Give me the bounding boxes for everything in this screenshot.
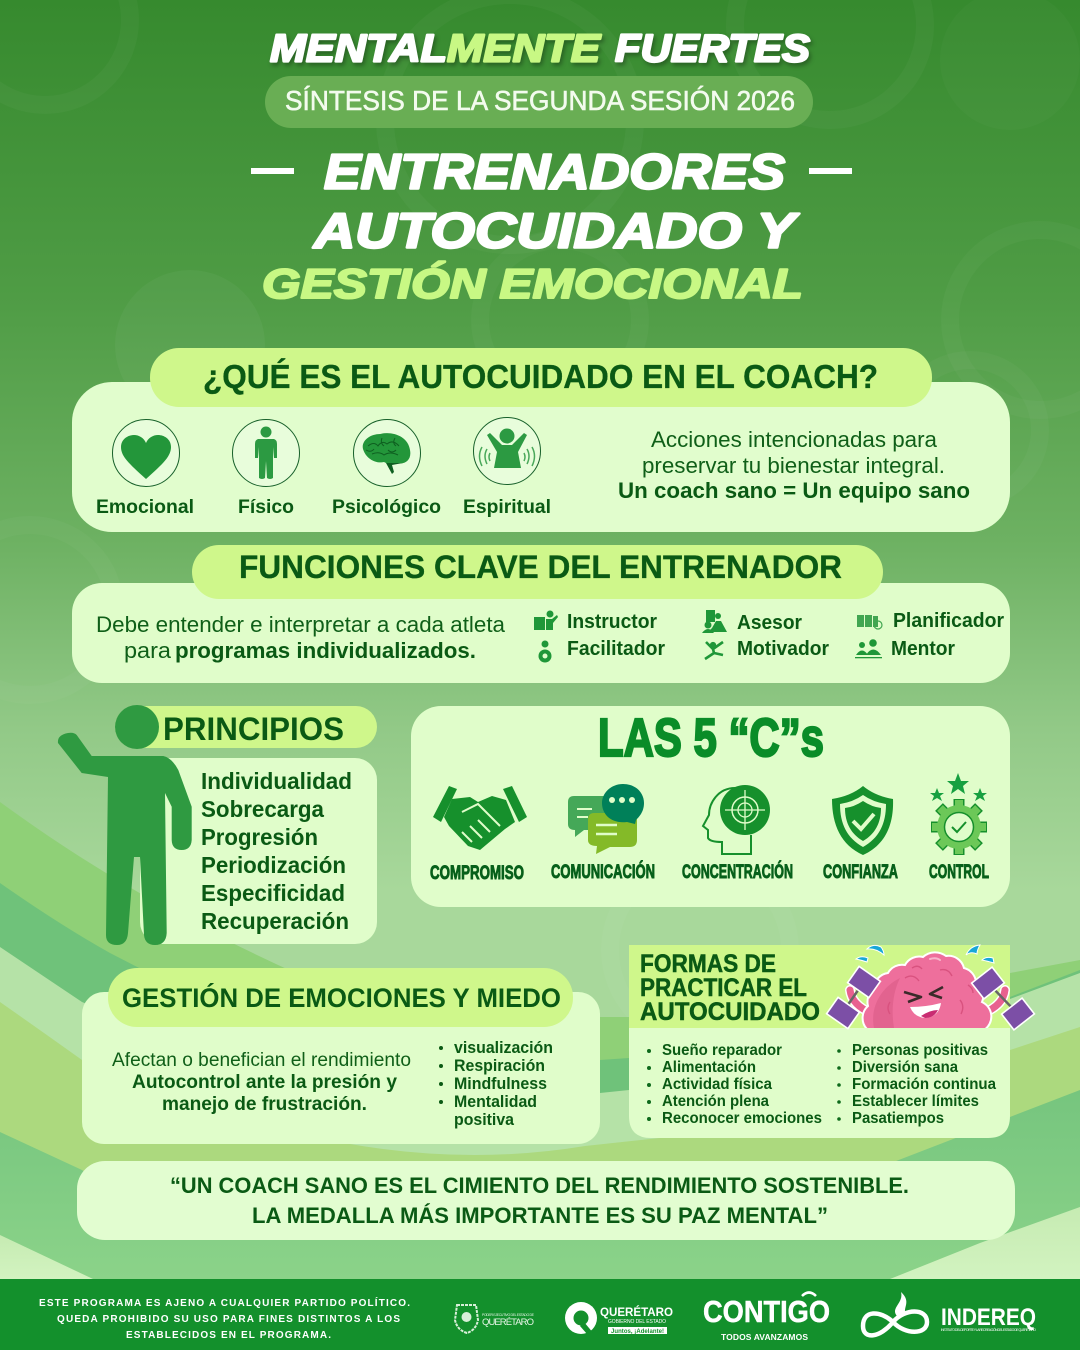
labels: five Cs: COMUNICACIÓN — [551, 859, 655, 883]
logo: Queretaro gobierno: Juntos, ¡Adelante! — [611, 1329, 664, 1335]
labels: dimensions: Emocional — [96, 496, 194, 518]
roles list — [567, 610, 1004, 660]
icon: spiritual — [474, 418, 540, 484]
panel: formas de practicar — [629, 945, 1034, 1138]
title: Mentalmente Fuertes: MENTE — [447, 28, 601, 70]
panel: principios — [58, 705, 377, 945]
labels: dimensions: Espiritual — [463, 496, 551, 518]
logo: Queretaro state: QUERÉTARO — [482, 1317, 534, 1328]
techniques list: positiva — [454, 1111, 515, 1129]
roles list: Facilitador — [567, 638, 665, 660]
labels: dimensions: Psicológico — [332, 496, 441, 518]
icon: speech bubbles — [568, 784, 644, 854]
header block: FORMAS DE — [640, 950, 776, 978]
description: Afectan o benefician el rendimiento — [112, 1050, 411, 1071]
icon: head with target — [703, 785, 770, 854]
icon: body — [232, 420, 300, 486]
disclaimer — [39, 1296, 410, 1341]
labels: five Cs — [430, 859, 989, 884]
disclaimer: ESTABLECIDOS EN EL PROGRAMA. — [126, 1330, 331, 1341]
heading pill — [115, 706, 377, 748]
labels: dimensions — [96, 496, 551, 518]
header block: AUTOCUIDADO — [640, 998, 820, 1026]
icon: brain lifting dumbbells — [827, 945, 1034, 1030]
roles list: Motivador — [737, 638, 829, 660]
principles list: Periodización — [201, 852, 346, 878]
description: para — [124, 638, 172, 663]
icon: instructor — [534, 610, 558, 630]
logo: Queretaro gobierno: QUERÉTARO — [600, 1304, 673, 1319]
list: left column: Actividad física — [662, 1076, 772, 1093]
definition text: Un coach sano = Un equipo sano — [618, 478, 970, 503]
description: manejo de frustración. — [162, 1093, 367, 1115]
principles list: Recuperación — [201, 908, 349, 934]
heading pill: GESTIÓN DE EMOCIONES Y MIEDO — [122, 982, 561, 1013]
list: left column: Reconocer emociones — [662, 1110, 822, 1127]
panel: las 5 C — [411, 706, 1010, 907]
icon: person figure — [58, 705, 192, 945]
logo: Queretaro state: PODER EJECUTIVO DEL ESTADO DE — [482, 1313, 535, 1317]
panel: gestion de emociones — [82, 968, 600, 1144]
icon: heart — [112, 420, 180, 486]
heading: LAS 5 “C”s — [598, 708, 824, 768]
panel: que es el autocuidado — [72, 348, 1010, 532]
heading pill: ¿QUÉ ES EL AUTOCUIDADO EN EL COACH? — [203, 358, 878, 395]
icon: gear with stars — [930, 773, 987, 855]
logo: Indereq: INSTITUTO DEL DEPORTE Y LA RECREACIÓN DEL ESTADO DE QUERÉTARO — [941, 1327, 1036, 1332]
roles list: Planificador — [893, 610, 1004, 632]
roles list: Asesor — [737, 612, 802, 634]
list: left column: Atención plena — [662, 1093, 769, 1110]
logo: Indereq: INDEREQ — [941, 1304, 1036, 1331]
labels: five Cs: CONTROL — [929, 861, 989, 883]
principles list — [201, 768, 352, 934]
labels: dimensions: Físico — [238, 496, 294, 518]
logo: Queretaro gobierno — [565, 1302, 673, 1335]
logo: Queretaro state — [455, 1305, 535, 1333]
icon: motivador — [705, 642, 723, 659]
main heading: AUTOCUIDADO Y — [313, 204, 800, 258]
list: right column: Personas positivas — [852, 1042, 988, 1059]
definition text — [618, 427, 970, 503]
description: programas individualizados. — [175, 638, 476, 663]
title: Mentalmente Fuertes: FUERTES — [615, 28, 810, 70]
roles list: Instructor — [567, 611, 657, 633]
title: Mentalmente Fuertes — [270, 28, 810, 70]
main heading — [251, 146, 852, 307]
heading pill: FUNCIONES CLAVE DEL ENTRENADOR — [239, 549, 842, 585]
panel: funciones clave — [72, 545, 1010, 683]
footer — [0, 1279, 1080, 1350]
labels: five Cs: CONCENTRACIÓN — [682, 859, 793, 883]
icon: handshake — [433, 786, 527, 850]
icon: facilitador — [538, 640, 552, 662]
description — [96, 612, 506, 663]
heading pill: PRINCIPIOS — [163, 711, 344, 747]
logo: Queretaro gobierno: GOBIERNO DEL ESTADO — [608, 1319, 666, 1325]
principles list: Sobrecarga — [201, 796, 324, 822]
callout: quote — [77, 1161, 1015, 1240]
principles list: Individualidad — [201, 768, 352, 794]
list: right column: Establecer límites — [852, 1093, 979, 1110]
main heading: ENTRENADORES — [324, 146, 785, 200]
icon: asesor — [702, 610, 727, 633]
description: Autocontrol ante la presión y — [132, 1071, 397, 1093]
heading pill — [108, 968, 573, 1027]
title: Mentalmente Fuertes: MENTAL — [270, 28, 447, 70]
definition text: preservar tu bienestar integral. — [642, 453, 945, 478]
techniques list: Mindfulness — [454, 1075, 547, 1093]
header titles — [251, 28, 852, 307]
roles list: Mentor — [891, 638, 955, 660]
logo: Indereq — [863, 1292, 1036, 1335]
principles list: Progresión — [201, 824, 318, 850]
description: Debe entender e interpretar a cada atleta — [96, 612, 506, 637]
list: left column: Sueño reparador — [662, 1042, 782, 1059]
disclaimer: QUEDA PROHIBIDO SU USO PARA FINES DISTINTOS A LOS — [57, 1314, 400, 1325]
labels: five Cs: CONFIANZA — [823, 861, 898, 883]
logo: Contigo: TODOS AVANZAMOS — [721, 1332, 808, 1342]
header block — [629, 945, 1010, 1028]
list: right column: Pasatiempos — [852, 1110, 944, 1127]
principles list: Especificidad — [201, 880, 345, 906]
callout: quote: LA MEDALLA MÁS IMPORTANTE ES SU PAZ MENTAL” — [252, 1203, 828, 1228]
callout: quote: “UN COACH SANO ES EL CIMIENTO DEL RENDIMIENTO SOSTENIBLE. — [170, 1173, 909, 1198]
techniques list — [439, 1039, 553, 1129]
list: left column — [647, 1042, 822, 1127]
definition text: Acciones intencionadas para — [651, 427, 938, 452]
heading pill — [150, 348, 932, 407]
session pill — [265, 76, 813, 128]
icon: brain — [354, 420, 420, 486]
list: left column: Alimentación — [662, 1059, 756, 1076]
techniques list: Respiración — [454, 1057, 545, 1075]
header block: PRACTICAR EL — [640, 974, 807, 1002]
icon: planificador — [857, 615, 882, 629]
list: right column: Diversión sana — [852, 1059, 958, 1076]
techniques list: visualización — [454, 1039, 553, 1057]
labels: five Cs: COMPROMISO — [430, 862, 524, 884]
logo: Contigo: CONTIGO — [703, 1294, 830, 1329]
session pill: SÍNTESIS DE LA SEGUNDA SESIÓN 2026 — [285, 85, 795, 116]
icon: shield — [832, 786, 893, 855]
logo: Contigo — [703, 1292, 830, 1342]
description — [112, 1050, 411, 1115]
list: right column: Formación continua — [852, 1076, 996, 1093]
heading pill — [192, 545, 883, 599]
disclaimer: ESTE PROGRAMA ES AJENO A CUALQUIER PARTIDO POLÍTICO. — [39, 1296, 410, 1309]
list: right column — [837, 1042, 996, 1127]
main heading: GESTIÓN EMOCIONAL — [262, 260, 803, 307]
icon: mentor — [855, 639, 882, 658]
techniques list: Mentalidad — [454, 1093, 537, 1111]
